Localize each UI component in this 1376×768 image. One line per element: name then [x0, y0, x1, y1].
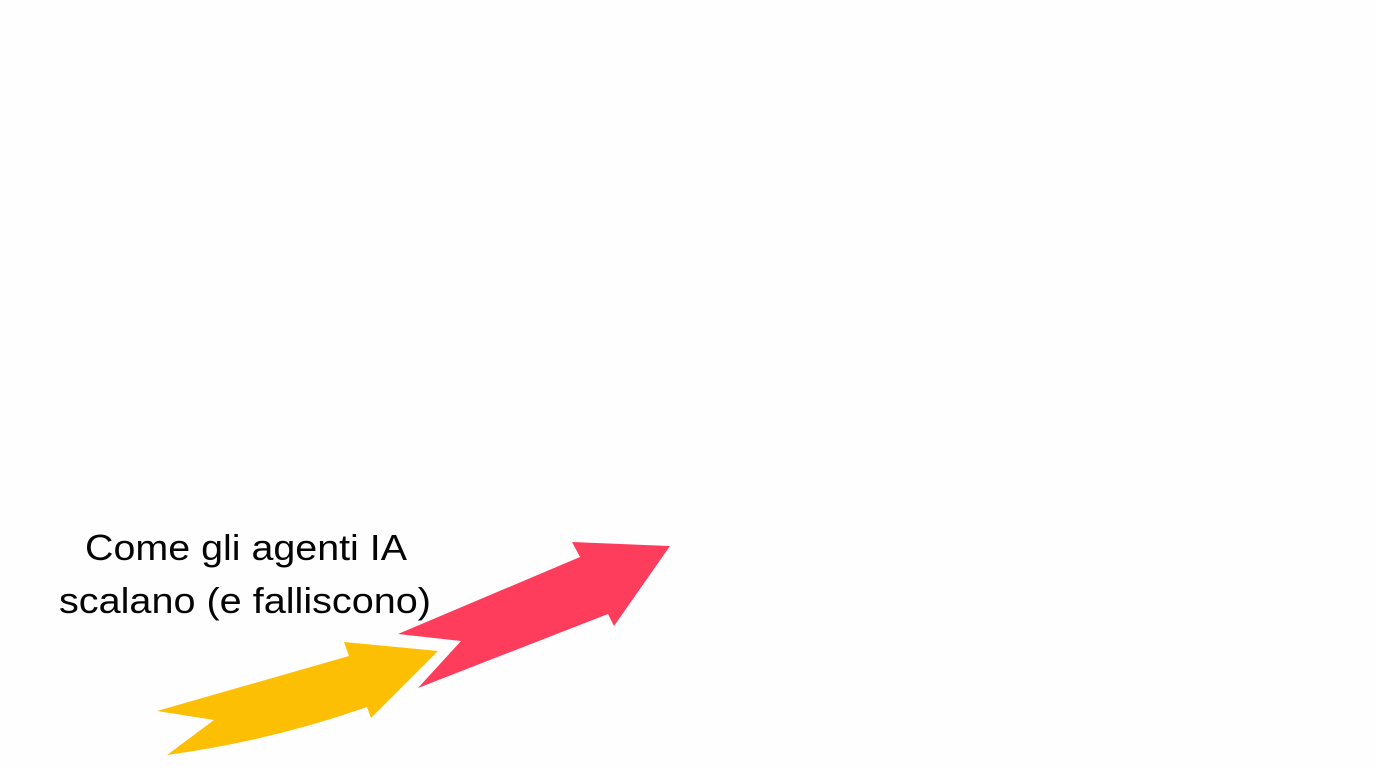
title — [59, 527, 431, 621]
title: Come gli agenti IA — [85, 527, 407, 568]
title: scalano (e falliscono) — [59, 580, 431, 621]
arrow: yellow — [157, 642, 438, 755]
arrow: red — [398, 542, 670, 688]
